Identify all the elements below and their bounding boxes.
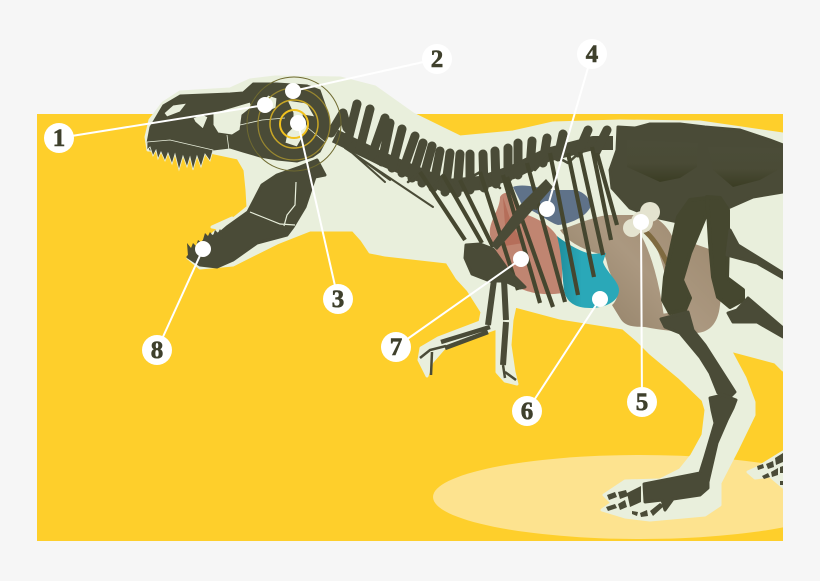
hearing rings [247, 77, 341, 171]
far foot toes [757, 453, 783, 485]
lower teeth [187, 229, 221, 255]
organ: stomach [557, 236, 619, 308]
leader lines [59, 54, 642, 411]
ground shadow [433, 455, 820, 539]
label 3: 3 [332, 286, 344, 313]
shoulder notch [533, 206, 537, 210]
label 6: 6 [521, 398, 533, 425]
neck and back vertebrae [331, 104, 613, 207]
label 2: 2 [431, 46, 443, 73]
label 1: 1 [53, 125, 65, 152]
arm bones [420, 280, 516, 380]
organ: intestines [560, 215, 721, 333]
organ: heart and liver [490, 193, 562, 294]
lower jaw [188, 160, 325, 267]
label 4 [577, 39, 607, 69]
shin and foot [644, 395, 736, 510]
yellow background panel [37, 114, 783, 541]
label 6 [512, 396, 542, 426]
shoulder blade [491, 179, 553, 250]
label 8 [142, 335, 172, 365]
far femur [707, 197, 743, 307]
label 2 [422, 44, 452, 74]
far upper leg [727, 230, 783, 278]
tibia [661, 312, 735, 397]
femur [663, 198, 708, 313]
label 7 [381, 332, 411, 362]
label 7: 7 [390, 334, 402, 361]
infographic: T. rex anatomy [37, 39, 783, 541]
hip joint [623, 202, 660, 237]
dinosaur body silhouette [146, 77, 783, 520]
label 8: 8 [151, 337, 163, 364]
label 3 [323, 284, 353, 314]
skeleton [147, 83, 783, 517]
skull seams [227, 118, 325, 150]
far lower leg [728, 298, 783, 337]
skull [147, 83, 330, 162]
pelvis [610, 124, 783, 222]
ribs [420, 147, 617, 307]
label 1 [44, 123, 74, 153]
toes [606, 486, 664, 517]
jaw seams [250, 182, 296, 226]
label 4: 4 [586, 41, 599, 68]
label 5: 5 [636, 389, 648, 416]
marker dots [195, 83, 649, 307]
organ: lungs [513, 186, 590, 225]
label 5 [627, 387, 657, 417]
upper teeth [147, 140, 213, 170]
shoulder girdle [465, 244, 525, 288]
pelvis recesses [637, 171, 766, 187]
